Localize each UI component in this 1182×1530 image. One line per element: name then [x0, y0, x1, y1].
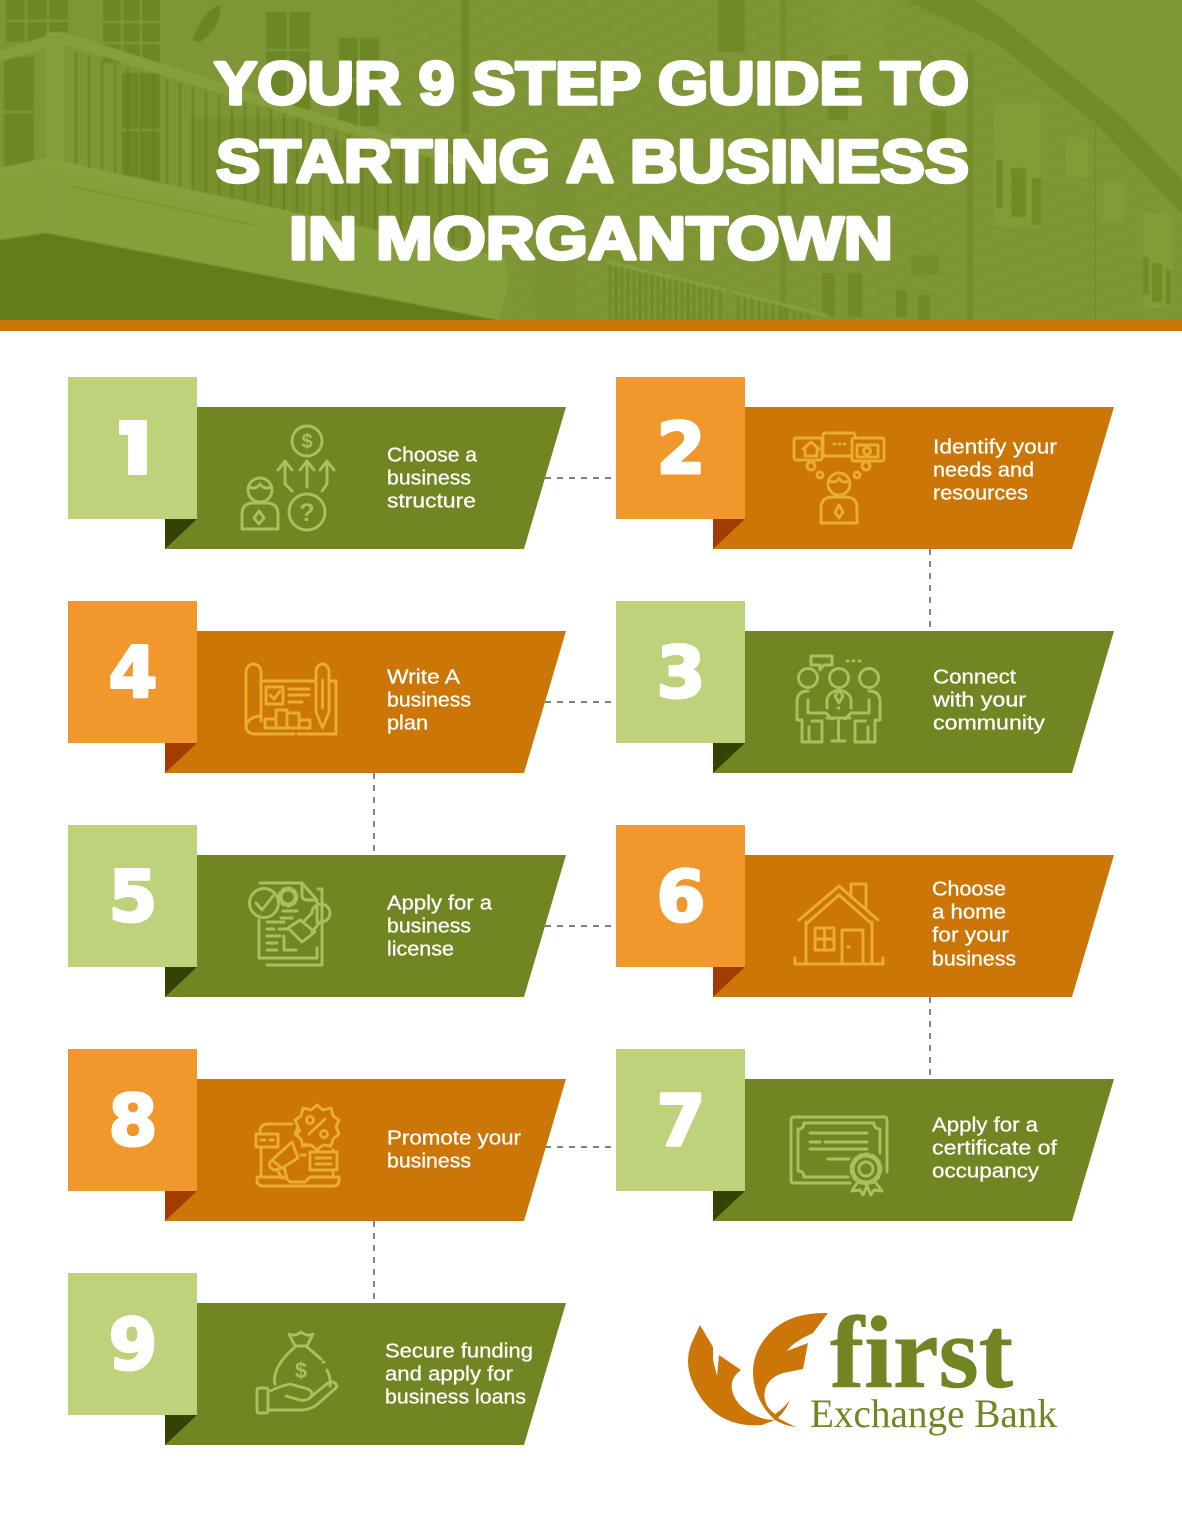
step 6 text: Choose	[932, 879, 1006, 901]
step 6	[616, 825, 1114, 997]
step 6 text: a home	[932, 902, 1006, 924]
step 7	[616, 1049, 1114, 1221]
step 4 text: Write A	[387, 667, 461, 689]
icon: person choosing	[242, 426, 334, 530]
icon: house	[795, 884, 883, 964]
step 7 text	[932, 1115, 1058, 1183]
step 3 text: community	[933, 713, 1045, 735]
icon: person choosing: $	[301, 431, 313, 453]
header photo banner	[0, 0, 1182, 325]
right windows	[828, 0, 1173, 308]
icon: person choosing: ?	[299, 499, 315, 527]
building trim and pipes	[461, 0, 469, 133]
step 4 text: business	[387, 690, 471, 712]
step 4	[68, 601, 566, 773]
step 4 text: plan	[387, 713, 428, 735]
title: IN MORGANTOWN	[289, 205, 893, 272]
step 8 text: business	[387, 1151, 471, 1173]
step 5	[68, 825, 566, 997]
step 9: 9	[109, 1304, 157, 1386]
icon: certificate	[791, 1117, 887, 1195]
orange header bar	[0, 320, 1182, 331]
step 5 text: business	[387, 916, 471, 938]
step 9 text: business loans	[385, 1387, 526, 1409]
step 3 text	[932, 667, 1045, 735]
step 1 text: structure	[387, 491, 476, 513]
step 8	[68, 1049, 566, 1221]
logo leaf mark	[688, 1313, 828, 1427]
title	[214, 50, 969, 272]
step 1 text: Choose a	[387, 445, 478, 467]
step 6 text: business	[932, 949, 1016, 971]
step 3 text: Connect	[933, 667, 1016, 689]
logo wordmark: first	[830, 1296, 1013, 1410]
step 6: 6	[657, 856, 705, 938]
step 5 text: license	[387, 939, 454, 961]
icon: money bag in hand	[257, 1332, 337, 1413]
step 5 text	[387, 893, 493, 961]
step 2	[616, 377, 1114, 549]
step 9 text	[385, 1341, 533, 1409]
step 1 text: business	[387, 468, 471, 490]
step 2 text	[933, 437, 1057, 505]
icon: license document	[250, 883, 330, 965]
step 3	[616, 601, 1114, 773]
step 2 text: resources	[933, 483, 1028, 505]
upper windows	[4, 0, 495, 255]
step 8 text	[387, 1128, 521, 1173]
logo: First Exchange Bank	[688, 1296, 1057, 1436]
step 2 text: Identify your	[933, 437, 1057, 459]
icon: community meeting	[797, 656, 880, 742]
step 9 text: Secure funding	[385, 1341, 533, 1363]
step 8: 8	[109, 1080, 157, 1162]
step 1	[68, 377, 566, 549]
step 7: 7	[657, 1080, 705, 1162]
title: YOUR 9 STEP GUIDE TO	[214, 50, 969, 117]
step 3 text: with your	[932, 690, 1026, 712]
step 7 text: Apply for a	[932, 1115, 1039, 1137]
step 2: 2	[657, 408, 705, 490]
leaf fixture	[192, 5, 220, 42]
step 3: 3	[657, 632, 705, 714]
step 5: 5	[109, 856, 157, 938]
icon: money bag in hand: $	[295, 1358, 307, 1383]
step 6 text: for your	[932, 925, 1009, 947]
icon: person with needs	[794, 433, 884, 523]
step 7 text: occupancy	[932, 1161, 1039, 1183]
step 9	[68, 1273, 566, 1445]
title: STARTING A BUSINESS	[216, 128, 969, 195]
step 1 text	[387, 445, 478, 513]
step 2 text: needs and	[933, 460, 1034, 482]
step 6 text	[932, 879, 1016, 971]
step 8 text: Promote your	[387, 1128, 521, 1150]
step 9 text: and apply for	[385, 1364, 513, 1386]
icon: business plan	[246, 664, 336, 734]
step 7 text: certificate of	[932, 1138, 1058, 1160]
step 5 text: Apply for a	[387, 893, 493, 915]
step 4 text	[387, 667, 471, 735]
dashed connectors	[374, 478, 930, 1303]
step 4: 4	[109, 632, 157, 714]
icon: promotion	[256, 1105, 339, 1186]
lower balcony railings	[610, 263, 808, 325]
logo: First Exchange Bank: Exchange Bank	[810, 1391, 1057, 1436]
balcony band and underside	[0, 165, 509, 325]
step 1: 1	[112, 408, 160, 490]
